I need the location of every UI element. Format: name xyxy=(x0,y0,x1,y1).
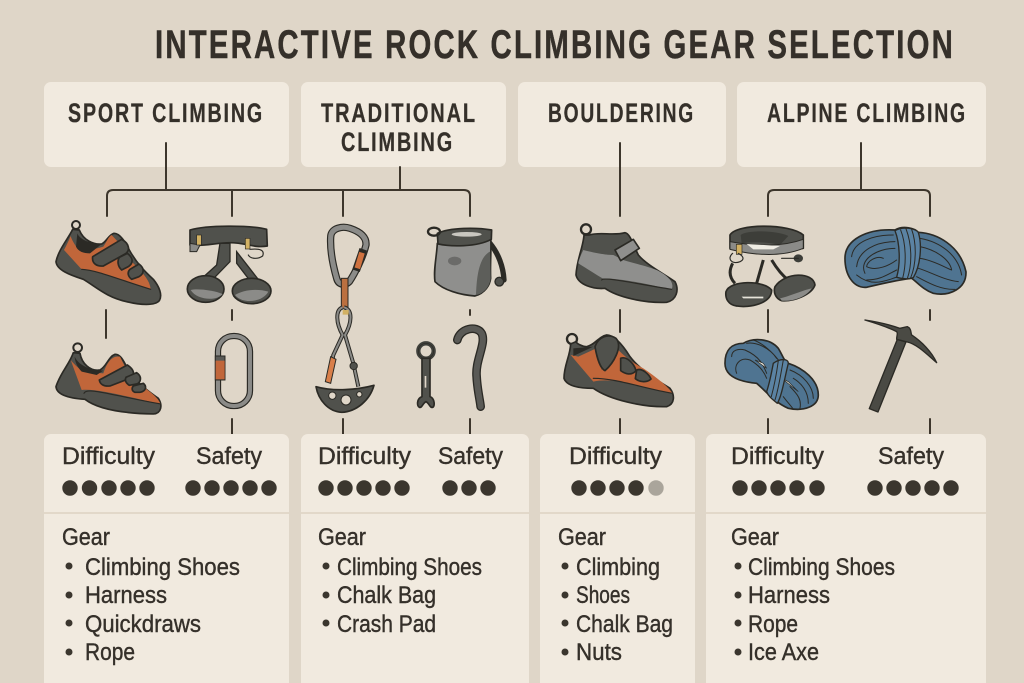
icon: quickdraw xyxy=(316,227,374,412)
gear list: Nuts xyxy=(576,639,622,666)
header: traditional climbing: CLIMBING xyxy=(341,127,454,157)
icons bouldering and alpine columns xyxy=(564,224,966,412)
gear list: Gear xyxy=(62,524,110,551)
icon: large blue rope coil xyxy=(845,227,966,294)
panel: sport climbing details xyxy=(44,434,289,683)
header: bouldering: BOULDERING xyxy=(548,98,695,128)
header: traditional climbing xyxy=(301,82,506,167)
gear list: Climbing Shoes xyxy=(85,554,240,581)
safety dots xyxy=(185,480,277,496)
gear list: Climbing Shoes xyxy=(748,554,895,581)
icons sport column xyxy=(56,221,271,414)
gear list: Rope xyxy=(748,611,798,638)
gear list: Harness xyxy=(85,582,167,609)
gear list: Harness xyxy=(748,582,830,609)
gear list: Chalk Bag xyxy=(576,611,673,638)
connector lines xyxy=(106,143,930,434)
icon: ice axe xyxy=(865,320,937,412)
gear list: Gear xyxy=(558,524,606,551)
gear list xyxy=(731,524,895,666)
icon: chalk bag xyxy=(428,228,504,296)
panel: alpine climbing details xyxy=(706,434,986,683)
gear list: Climbing Shoes xyxy=(337,554,482,581)
icon: climbing shoe orange large xyxy=(56,221,161,304)
safety dots xyxy=(442,480,496,496)
safety label: Safety xyxy=(438,443,503,470)
gear list: Chalk Bag xyxy=(337,582,436,609)
header: sport climbing xyxy=(44,82,289,167)
icon: small blue rope coil xyxy=(725,340,818,409)
header: bouldering xyxy=(518,82,726,167)
gear list: Climbing xyxy=(576,554,660,581)
header: alpine climbing xyxy=(737,82,986,167)
gear list: Rope xyxy=(85,639,135,666)
panel: bouldering details xyxy=(540,434,695,683)
difficulty label: Difficulty xyxy=(731,443,824,470)
difficulty dots xyxy=(318,480,410,496)
gear list xyxy=(558,524,673,666)
icon: harness with loops xyxy=(726,226,815,307)
safety dots xyxy=(867,480,959,496)
gear list: Crash Pad xyxy=(337,611,436,638)
difficulty dots xyxy=(62,480,155,496)
gear list: Gear xyxy=(731,524,779,551)
icon: grey approach shoe xyxy=(576,224,677,302)
icon: carabiner xyxy=(215,336,250,406)
icon: climbing shoe orange small xyxy=(56,343,161,414)
difficulty label: Difficulty xyxy=(569,443,662,470)
difficulty dots xyxy=(571,480,664,496)
header: traditional climbing: TRADITIONAL xyxy=(321,98,477,128)
icon: nut tool xyxy=(418,343,434,407)
panel: traditional climbing details xyxy=(301,434,529,683)
gear list xyxy=(62,524,240,666)
gear list: Shoes xyxy=(576,582,630,609)
difficulty label: Difficulty xyxy=(62,443,155,470)
safety label: Safety xyxy=(878,443,944,470)
header: sport climbing: SPORT CLIMBING xyxy=(68,98,264,128)
gear list xyxy=(318,524,482,638)
difficulty label: Difficulty xyxy=(318,443,411,470)
icons traditional column xyxy=(316,227,504,412)
difficulty dots xyxy=(732,480,825,496)
gear list: Ice Axe xyxy=(748,639,819,666)
safety label: Safety xyxy=(196,443,262,470)
icon: harness xyxy=(187,226,271,304)
icon: climbing shoe orange xyxy=(564,334,673,407)
gear list: Quickdraws xyxy=(85,611,201,638)
gear list: Gear xyxy=(318,524,366,551)
icon: hook xyxy=(457,329,483,407)
